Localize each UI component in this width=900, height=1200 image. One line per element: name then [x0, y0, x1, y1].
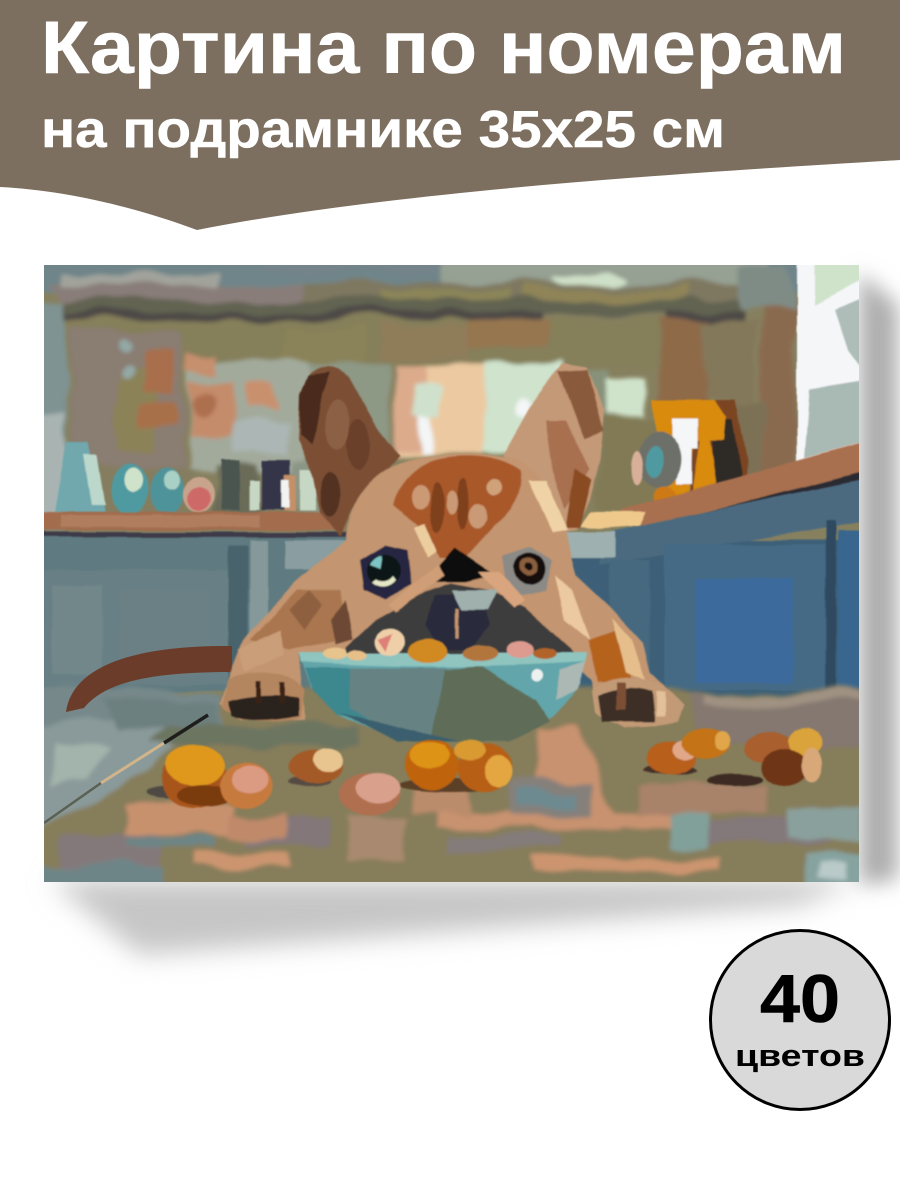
food on table: [146, 728, 822, 815]
food in bowl: [323, 628, 557, 663]
left paw: [222, 672, 303, 722]
kitchen background: [44, 265, 798, 531]
right eye: [503, 546, 552, 595]
left ear: [298, 367, 400, 537]
subtitle: на подрамнике 35х25 см: [41, 101, 725, 159]
head: [345, 453, 590, 655]
left arm shading: [250, 590, 345, 650]
painting: french bulldog at a food bowl: [30, 250, 870, 890]
title: Картина по номерам: [41, 6, 846, 89]
counter: [44, 442, 859, 532]
wall colour patches: [66, 320, 666, 368]
wrinkle folds: [388, 565, 444, 612]
shelf objects: [98, 464, 186, 512]
brush line on table: [44, 715, 208, 823]
orange peaches: [161, 764, 226, 809]
jars and kitchenware: [54, 258, 870, 516]
mixer: [690, 400, 747, 492]
bowl: [300, 628, 587, 742]
reflections and shadows: [146, 785, 170, 799]
body and arms silhouette: [220, 540, 684, 728]
header banner: [0, 0, 900, 230]
right arm shading: [588, 630, 632, 682]
cabinets: [34, 478, 870, 700]
nose: [436, 547, 490, 584]
right paw: [592, 677, 684, 727]
chair back: [66, 646, 232, 712]
badge number: 40: [760, 961, 840, 1037]
window: [797, 258, 870, 465]
muzzle: [345, 583, 575, 655]
left eye: [360, 545, 412, 600]
dog: [220, 363, 684, 728]
table: [34, 690, 870, 890]
right ear: [503, 363, 605, 532]
rust forehead markings: [392, 455, 521, 558]
badge label: цветов: [735, 1038, 865, 1073]
badge: 40 colours: [710, 930, 890, 1110]
cream highlights: [528, 480, 568, 532]
canvas shadow: [50, 272, 898, 955]
